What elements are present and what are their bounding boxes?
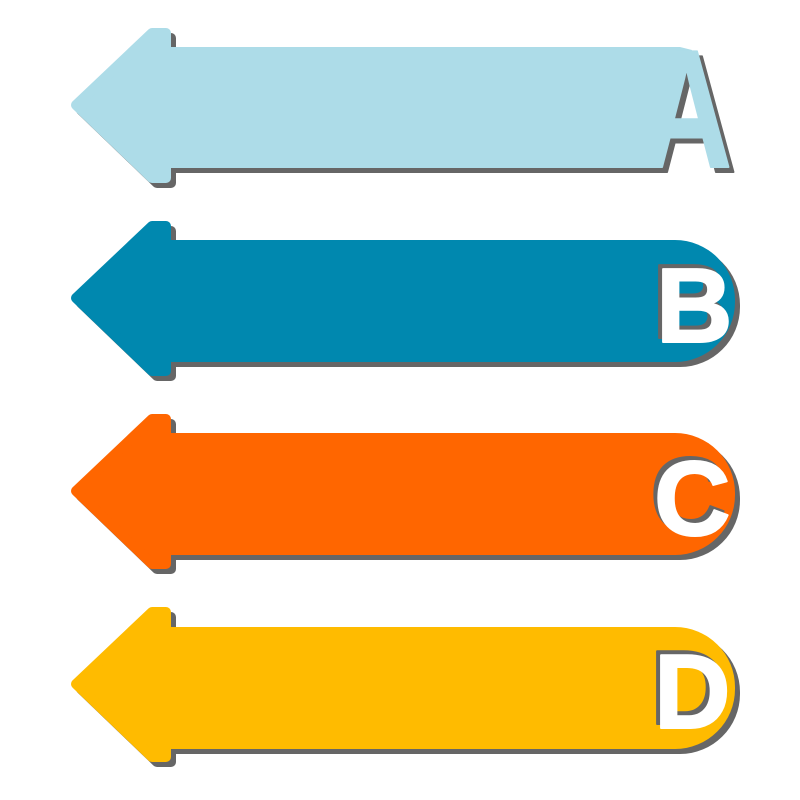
letter D: D	[654, 633, 731, 751]
letter C: C	[650, 436, 727, 554]
arrow A: A	[646, 22, 737, 208]
arrow C	[76, 419, 740, 569]
arrow D	[76, 612, 740, 762]
letter D: D	[650, 629, 727, 747]
letter B: B	[656, 247, 733, 365]
letter A: A	[641, 17, 732, 203]
letter B: B	[652, 243, 729, 361]
arrow A	[76, 17, 737, 208]
arrow B	[76, 226, 740, 376]
letter C: C	[654, 440, 731, 558]
